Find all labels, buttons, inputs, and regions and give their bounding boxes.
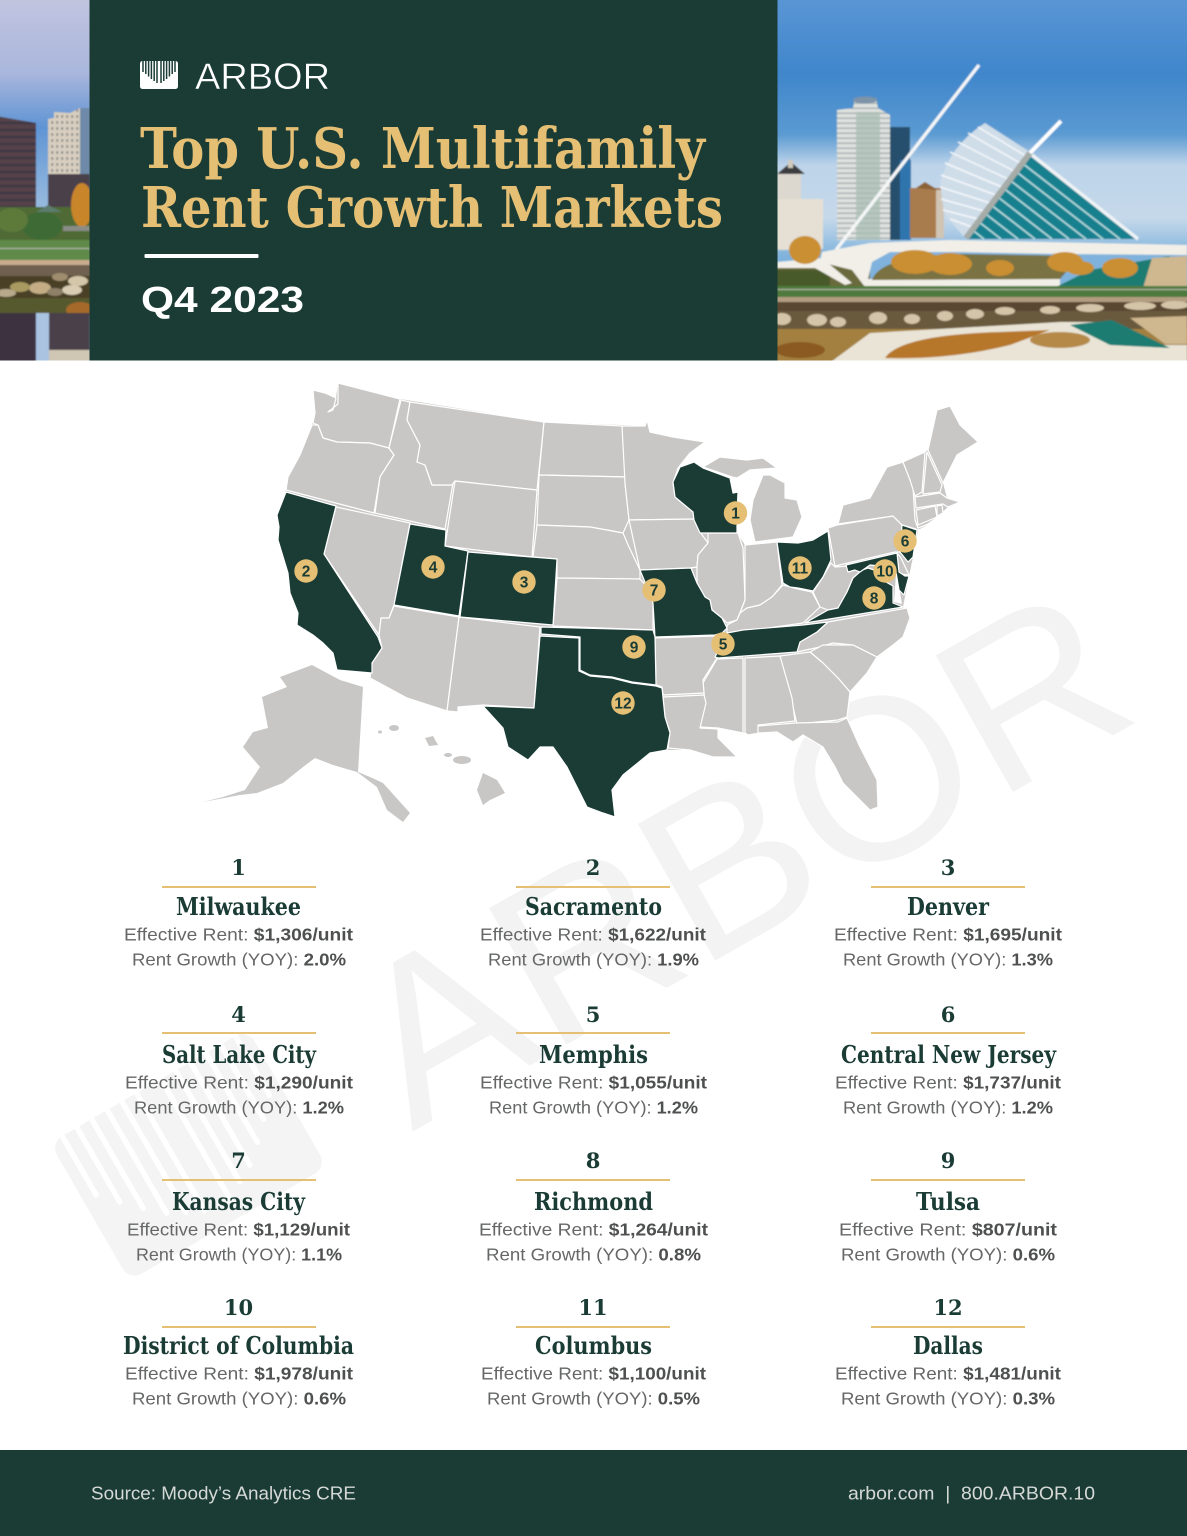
ranking card 1: Milwaukee: Rent Growth (YOY): 2.0% — [132, 950, 346, 970]
highlighted states — [277, 462, 917, 817]
map markers: 3 — [520, 574, 529, 592]
ranking card 6: Central New Jersey — [835, 1002, 1061, 1118]
ranking card 6: Central New Jersey: Effective Rent: $1,737/unit — [835, 1072, 1061, 1092]
title: Top U.S. Multifamily — [140, 116, 706, 182]
ranking card 2: Sacramento: 2 — [586, 855, 600, 880]
ranking card 5: Memphis: Memphis — [539, 1040, 648, 1069]
ranking card 6: Central New Jersey: Central New Jersey — [841, 1040, 1057, 1069]
ranking card 11: Columbus — [481, 1295, 706, 1408]
title — [140, 116, 723, 241]
subtitle: quarter: Q4 2023 — [141, 279, 304, 320]
ranking card 3: Denver: Denver — [907, 892, 989, 921]
contiguous US silhouette — [277, 383, 978, 817]
ranking card 5: Memphis: Effective Rent: $1,055/unit — [480, 1072, 707, 1092]
Alaska — [203, 665, 410, 822]
ranking card 10: District of Columbia: 10 — [224, 1295, 253, 1320]
ranking card 8: Richmond: Rent Growth (YOY): 0.8% — [486, 1244, 701, 1264]
ranking card 11: Columbus: Columbus — [535, 1331, 652, 1360]
map markers: 12 — [614, 696, 632, 712]
header photo: right Milwaukee Art Museum — [770, 0, 1187, 370]
ranking card 2: Sacramento: Effective Rent: $1,622/unit — [480, 924, 706, 944]
ranking card 2: Sacramento: Rent Growth (YOY): 1.9% — [488, 950, 699, 970]
ranking card 12: Dallas: 12 — [933, 1295, 963, 1320]
ranking card 12: Dallas: Dallas — [913, 1331, 983, 1360]
footer — [0, 1450, 1187, 1536]
ranking card 10: District of Columbia: Rent Growth (YOY): 0.6% — [132, 1388, 346, 1408]
ranking card 10: District of Columbia: Effective Rent: $1,978/unit — [125, 1364, 353, 1384]
ranking card 6: Central New Jersey: 6 — [941, 1002, 955, 1027]
map markers: 8 — [870, 590, 879, 608]
ranking card 7: Kansas City — [127, 1148, 350, 1264]
ranking card 4: Salt Lake City: Rent Growth (YOY): 1.2% — [134, 1098, 344, 1118]
logo mark — [140, 60, 178, 89]
map markers: 9 — [630, 640, 639, 656]
ranking card 8: Richmond: Richmond — [534, 1187, 653, 1216]
ranking card 4: Salt Lake City: 4 — [231, 1002, 246, 1027]
map markers: 1 — [731, 506, 740, 522]
Hawaii — [378, 725, 505, 805]
watermark: ARBOR wordmark: ARBOR — [311, 539, 1169, 1175]
ranking card 12: Dallas — [835, 1295, 1061, 1408]
header photo: left city skyline — [0, 0, 90, 360]
ranking card 1: Milwaukee: Milwaukee — [176, 892, 301, 921]
ranking card 9: Tulsa: 9 — [941, 1148, 955, 1173]
ranking card 12: Dallas: Effective Rent: $1,481/unit — [835, 1364, 1061, 1384]
ranking card 9: Tulsa: Rent Growth (YOY): 0.6% — [841, 1244, 1055, 1264]
title: Rent Growth Markets — [141, 175, 723, 241]
map markers: 5 — [719, 636, 728, 654]
ranking card 5: Memphis — [480, 1002, 707, 1118]
US map — [203, 383, 978, 822]
ranking card 4: Salt Lake City: Salt Lake City — [162, 1040, 317, 1069]
ranking card 5: Memphis: 5 — [586, 1002, 600, 1027]
ranking card 4: Salt Lake City — [125, 1002, 353, 1118]
ranking card 10: District of Columbia — [123, 1295, 354, 1408]
ranking card 7: Kansas City: Rent Growth (YOY): 1.1% — [136, 1244, 342, 1264]
ranking card 8: Richmond: Effective Rent: $1,264/unit — [479, 1220, 708, 1240]
ranking card 1: Milwaukee: 1 — [231, 855, 246, 880]
ranking card 6: Central New Jersey: Rent Growth (YOY): 1.2% — [843, 1098, 1053, 1118]
ranking card 11: Columbus: 11 — [578, 1295, 608, 1320]
ranking card 2: Sacramento — [480, 855, 706, 970]
ranking card 5: Memphis: Rent Growth (YOY): 1.2% — [489, 1098, 698, 1118]
ranking card 12: Dallas: Rent Growth (YOY): 0.3% — [841, 1388, 1055, 1408]
ranking card 8: Richmond — [479, 1148, 708, 1264]
ranking card 8: Richmond: 8 — [586, 1148, 600, 1173]
ranking card 1: Milwaukee: Effective Rent: $1,306/unit — [124, 924, 353, 944]
ranking card 3: Denver: Rent Growth (YOY): 1.3% — [843, 950, 1053, 970]
map markers: 7 — [650, 582, 658, 600]
ranking card 2: Sacramento: Sacramento — [525, 892, 662, 921]
ranking card 4: Salt Lake City: Effective Rent: $1,290/unit — [125, 1072, 353, 1092]
ranking card 9: Tulsa — [839, 1148, 1057, 1264]
ranking card 3: Denver: Effective Rent: $1,695/unit — [834, 924, 1062, 944]
ranking card 3: Denver — [834, 855, 1062, 970]
ranking card 11: Columbus: Rent Growth (YOY): 0.5% — [487, 1388, 700, 1408]
gray states — [286, 383, 978, 810]
map markers — [294, 501, 917, 715]
map markers: 11 — [792, 560, 809, 578]
map markers: 10 — [876, 564, 894, 580]
ranking card 7: Kansas City: 7 — [231, 1148, 246, 1173]
ranking card 7: Kansas City: Kansas City — [172, 1187, 306, 1216]
ranking card 1: Milwaukee — [124, 855, 353, 970]
header panel — [90, 0, 778, 360]
map markers: 4 — [429, 560, 438, 576]
ranking card 10: District of Columbia: District of Columbia — [123, 1331, 354, 1360]
source note: Source: Moody’s Analytics CRE — [91, 1484, 356, 1504]
ranking card 7: Kansas City: Effective Rent: $1,129/unit — [127, 1220, 350, 1240]
watermark: Arbor logo mark — [47, 1024, 327, 1281]
map markers: 2 — [302, 564, 310, 580]
ranking card 9: Tulsa: Effective Rent: $807/unit — [839, 1220, 1057, 1240]
map markers: 6 — [901, 534, 910, 550]
logo wordmark: ARBOR — [195, 56, 330, 97]
ranking card 11: Columbus: Effective Rent: $1,100/unit — [481, 1364, 706, 1384]
contact details: arbor.com | 800.ARBOR.10 — [848, 1484, 1095, 1504]
ranking card 9: Tulsa: Tulsa — [916, 1187, 980, 1216]
ranking card 3: Denver: 3 — [941, 855, 955, 880]
